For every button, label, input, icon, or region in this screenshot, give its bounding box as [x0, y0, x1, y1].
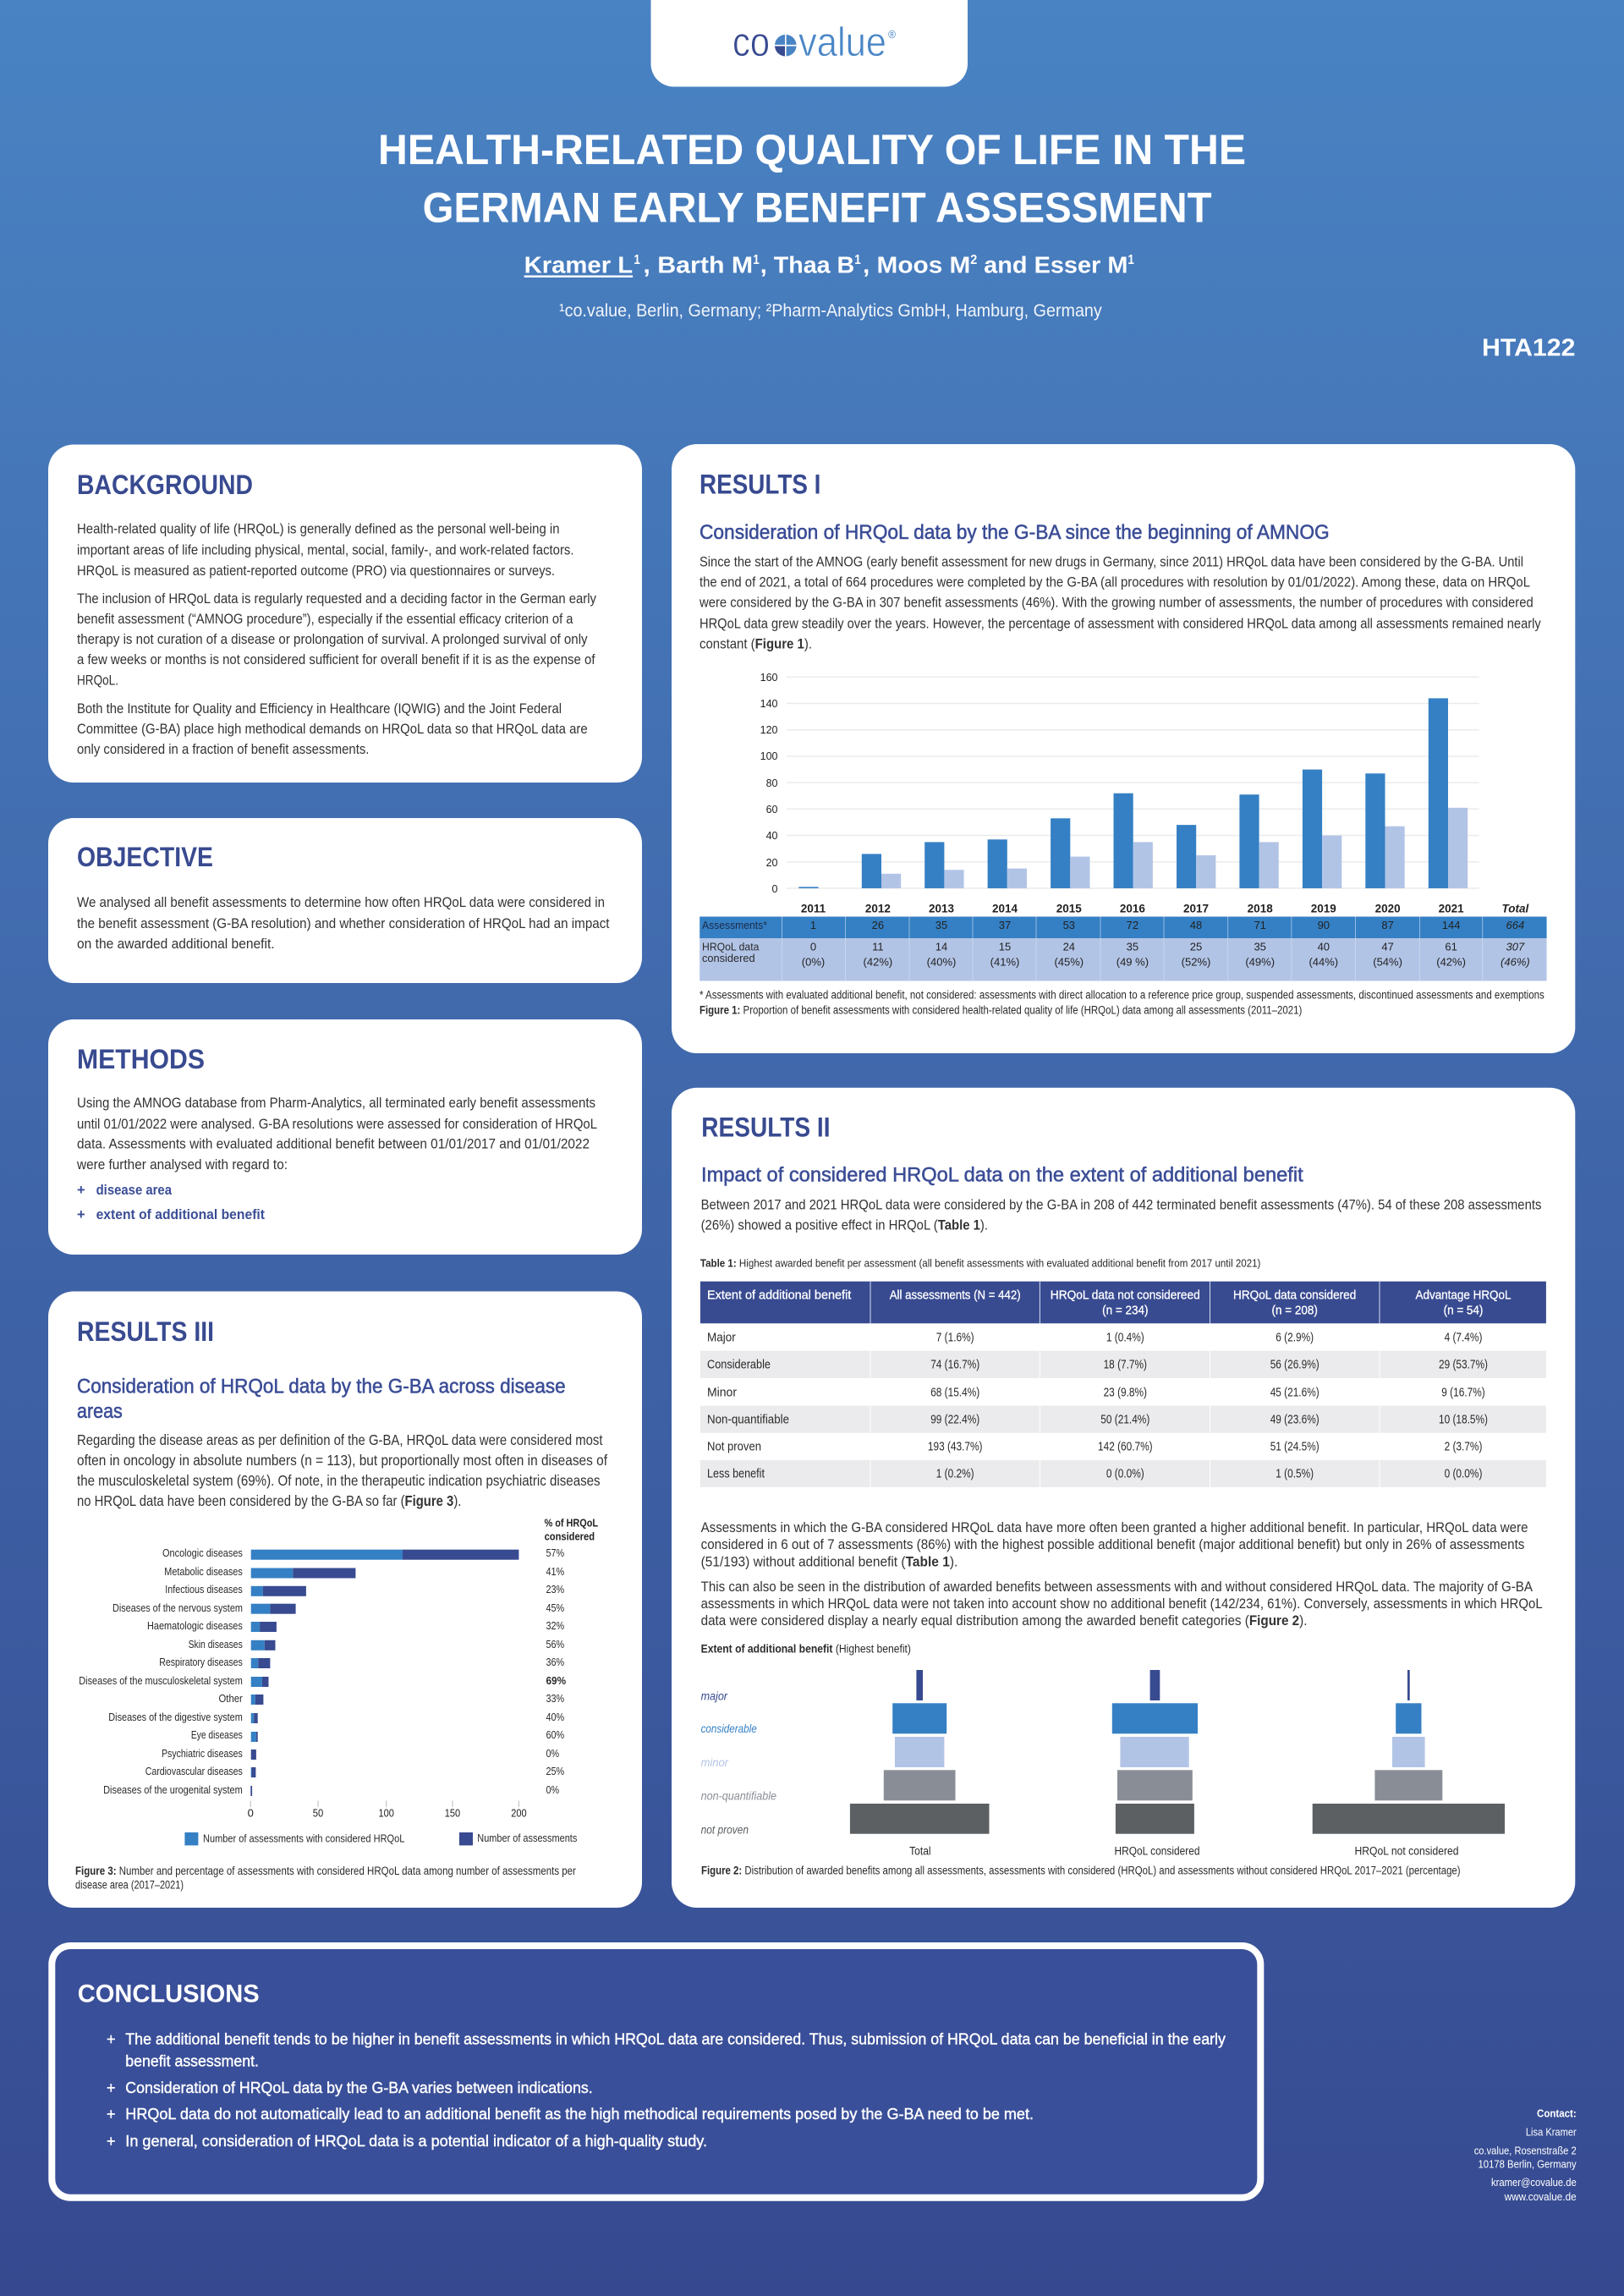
category labels: Diseases of the urogenital system [103, 1783, 243, 1796]
table row: less benefit: 1 (0.5%) [1276, 1467, 1314, 1480]
legend [184, 1832, 578, 1845]
funnel: HRQoL considered [1112, 1670, 1199, 1857]
table header: HRQoL data considered [1233, 1288, 1356, 1302]
table row: less benefit: 0 (0.0%) [1106, 1467, 1144, 1480]
bullet list: conclusions: HRQoL data do not automatically lead to an additional benefit as the high methodical requirements posed by the G-BA need to be met. [125, 2106, 1034, 2123]
category labels: Cardiovascular diseases [145, 1765, 243, 1777]
bullet list: methods: disease area [96, 1183, 173, 1198]
table row: minor: 23 (9.8%) [1104, 1386, 1147, 1399]
text block: results I: Since the start of the AMNOG (early benefit assessment for new drugs in Germany, since 2011) HRQoL data have been considered by the G-BA. Until [700, 555, 1523, 570]
category labels: considerable [701, 1722, 757, 1735]
heading: methods: METHODS [77, 1044, 205, 1074]
contact: 10178 Berlin, Germany [1479, 2159, 1577, 2171]
heading: conclusions: CONCLUSIONS [78, 1980, 260, 2008]
table row: assessments: 71 [1254, 919, 1266, 931]
bullet list: conclusions: + [107, 2106, 116, 2123]
table row: HRQoL data considered: 14 [935, 941, 947, 953]
bullet list: conclusions: benefit assessment. [125, 2052, 259, 2069]
heading: objective: OBJECTIVE [77, 842, 213, 872]
bullet list: methods [77, 1183, 265, 1222]
heading: results II: RESULTS II [701, 1112, 831, 1142]
table year header: 2012 [865, 903, 891, 915]
table row: HRQoL data considered: (49 %) [1116, 956, 1149, 968]
table year header: 2013 [929, 903, 955, 915]
text block: results II discussion: This can also be seen in the distribution of awarded benefits between assessments with and without considered HRQoL data. The majority of G-BA [701, 1579, 1533, 1595]
table row: considerable: 18 (7.7%) [1104, 1358, 1147, 1371]
category labels: Oncologic diseases [162, 1546, 243, 1559]
percentage values: 69% [546, 1674, 566, 1687]
panel: results I [672, 444, 1575, 1053]
y axis and gridlines: 120 [760, 724, 778, 736]
text block: background: Committee (G-BA) place high methodical demands on HRQoL data so that HRQoL data are [77, 722, 588, 737]
authors: 1 [753, 253, 760, 267]
text block: results II intro: (26%) showed a positive effect in HRQoL (Table 1). [701, 1218, 988, 1233]
text block: background: HRQoL is measured as patient-reported outcome (PRO) via questionnaires or surveys. [77, 563, 555, 579]
bullet list: conclusions: + [107, 2031, 116, 2048]
category labels: Eye diseases [191, 1728, 243, 1741]
table header: Advantage HRQoL [1416, 1288, 1511, 1302]
table row: assessments: 90 [1318, 919, 1330, 931]
y axis and gridlines: 80 [766, 777, 778, 789]
text block: results II discussion: data were considered display a nearly equal distribution among the awarded benefit categories (Figure 2). [701, 1613, 1308, 1629]
table row: assessments: 48 [1190, 919, 1202, 931]
legend: Number of assessments [477, 1832, 578, 1844]
y axis and gridlines: 40 [766, 830, 778, 842]
category labels: Diseases of the nervous system [112, 1601, 243, 1614]
table row: minor: 68 (15.4%) [930, 1386, 979, 1399]
text block: background: only considered in a fraction of benefit assessments. [77, 742, 369, 757]
percentage values: 40% [546, 1711, 565, 1723]
legend: Number of assessments with considered HRQoL [203, 1832, 404, 1844]
y axis and gridlines: 160 [760, 672, 778, 684]
funnel: HRQoL not considered [1313, 1670, 1505, 1857]
panel: background [48, 445, 642, 783]
table header: (n = 208) [1272, 1304, 1318, 1317]
text block: results III: no HRQoL data have been considered by the G-BA so far (Figure 3). [77, 1492, 461, 1509]
authors: 1 [634, 253, 640, 267]
table row: HRQoL data considered: 35 [1254, 941, 1266, 953]
table row: minor: Minor [707, 1386, 737, 1399]
table row: major: Major [707, 1331, 736, 1344]
text block: background: Health-related quality of life (HRQoL) is generally defined as the personal well-being in [77, 522, 560, 537]
table row: assessments: 664 [1506, 919, 1524, 931]
table row: HRQoL data considered: 25 [1190, 941, 1202, 953]
panel: conclusions [52, 1946, 1260, 2198]
table row: assessments: 72 [1127, 919, 1138, 931]
y axis and gridlines: 140 [760, 698, 778, 710]
table row: major [707, 1331, 1482, 1344]
text block: methods: were further analysed with regard to: [76, 1157, 288, 1173]
text block: results II intro: Between 2017 and 2021 HRQoL data were considered by the G-BA in 208 of 442 terminated benefit assessments (47%). 54 of these 208 assessments [701, 1197, 1541, 1212]
logo: co.value: co [732, 20, 770, 65]
table header: HRQoL data not considereed [1051, 1288, 1200, 1302]
caption: figure 3: Figure 3: Number and percentage of assessments with considered HRQoL data among number of assessments per [75, 1865, 576, 1877]
bullet list: conclusions: The additional benefit tends to be higher in benefit assessments in which HRQoL data are considered. Thus, submission of HRQoL data can be beneficial in the early [125, 2031, 1226, 2048]
table year header: 2017 [1183, 903, 1209, 915]
text block: objective: We analysed all benefit assessments to determine how often HRQoL data were considered in [77, 895, 605, 910]
x axis [248, 1800, 527, 1819]
percentage values [546, 1546, 566, 1796]
table row: non-quantifiable: 49 (23.6%) [1270, 1413, 1320, 1426]
panel: results III [48, 1291, 642, 1908]
table row: HRQoL data considered: 61 [1445, 941, 1457, 953]
authors: 1 [1127, 253, 1134, 267]
caption: figure 2: Figure 2: Distribution of awarded benefits among all assessments, assessments with considered (HRQoL) and assessments without considered HRQoL 2017–2021 (percentage) [701, 1864, 1461, 1876]
text block: results I: were considered by the G-BA in 307 benefit assessments (46%). With the growing number of assessments, the number of procedures with considered [699, 596, 1533, 611]
table header: (n = 234) [1102, 1304, 1149, 1317]
authors: Kramer L [524, 252, 633, 278]
bars: assessments [798, 698, 1448, 888]
y axis and gridlines [760, 672, 1479, 895]
category labels: Diseases of the musculoskeletal system [79, 1674, 243, 1687]
table year header [801, 903, 1529, 915]
table year header: 2016 [1120, 903, 1145, 915]
table row: HRQoL data considered: (46%) [1501, 956, 1530, 968]
text block: results III [77, 1431, 607, 1509]
percentage values: 25% [546, 1765, 565, 1777]
table row: HRQoL data considered: (45%) [1054, 956, 1084, 968]
text block: results I: the end of 2021, a total of 664 procedures were completed by the G-BA (all procedures with resolution by 01/01/2022). Among these, data on HRQoL [700, 575, 1530, 590]
text block: results II discussion: Assessments in which the G-BA considered HRQoL data have more often been granted a higher additional benefit. In particular, HRQoL data were [701, 1520, 1528, 1535]
table row: HRQoL data considered: (42%) [1436, 956, 1466, 968]
text block: results III: the musculoskeletal system (69%). Of note, in the therapeutic indication psychiatric diseases [77, 1472, 601, 1489]
category labels: non-quantifiable [701, 1788, 776, 1802]
category labels: minor [701, 1755, 729, 1769]
footnote and caption: figure 1 [700, 989, 1544, 1017]
text block: results II discussion: considered in 6 out of 7 assessments (86%) with the highest possible additional benefit (major additional benefit) but only in 26% of assessments [701, 1537, 1524, 1552]
table row: assessments: 144 [1442, 919, 1460, 931]
chart label: Extent of additional benefit (Highest benefit) [701, 1642, 911, 1655]
bullet list: conclusions: In general, consideration of HRQoL data is a potential indicator of a high-quality study. [125, 2133, 707, 2150]
table row: HRQoL data considered: 0 [810, 941, 816, 953]
table row: HRQoL data considered: (49%) [1245, 956, 1275, 968]
table year header: 2020 [1375, 903, 1401, 915]
x axis: 150 [445, 1806, 460, 1819]
authors: 1 [854, 253, 861, 267]
table row: assessments: 35 [935, 919, 947, 931]
text block: results I: HRQoL data grew steadily over the years. However, the percentage of assessment with considered HRQoL data among all assessments remained nearly [700, 616, 1541, 631]
table row: non-quantifiable: 50 (21.4%) [1100, 1413, 1149, 1426]
caption: figure 3: disease area (2017–2021) [75, 1879, 184, 1892]
data table: assessments per year [700, 903, 1547, 981]
text block: background: benefit assessment (“AMNOG procedure”), especially if the essential efficacy criterion of a [77, 612, 573, 627]
bullet list: methods: + [77, 1207, 85, 1222]
percentage values: 0% [546, 1783, 559, 1796]
panel: objective [48, 818, 642, 983]
text block: results II discussion: (51/193) without additional benefit (Table 1). [701, 1554, 957, 1569]
table row: not proven: 193 (43.7%) [928, 1440, 982, 1453]
authors: , Barth M [643, 252, 753, 278]
authors [524, 252, 1134, 278]
heading: results III: RESULTS III [77, 1316, 214, 1347]
title: HEALTH-RELATED QUALITY OF LIFE IN THE [378, 126, 1246, 173]
text block: results I [699, 555, 1541, 651]
x axis: 0 [248, 1806, 254, 1819]
caption: table 1: Table 1: Highest awarded benefit per assessment (all benefit assessments with evaluated additional benefit from 2017 until 2021) [700, 1256, 1260, 1269]
percentage values: 45% [546, 1601, 565, 1614]
bullet list: methods: extent of additional benefit [96, 1207, 265, 1222]
contact [1474, 2108, 1577, 2203]
title [378, 126, 1246, 231]
table row: HRQoL data considered: (52%) [1182, 956, 1210, 968]
title: GERMAN EARLY BENEFIT ASSESSMENT [423, 184, 1212, 231]
funnel: HRQoL not considered: HRQoL not considered [1355, 1844, 1458, 1857]
table row: less benefit: Less benefit [707, 1467, 765, 1480]
table row: assessments: 26 [872, 919, 884, 931]
subheading: results III: Consideration of HRQoL data by the G-BA across disease [77, 1376, 566, 1398]
footnote and caption: figure 1: Figure 1: Proportion of benefit assessments with considered health-related quality of life (HRQoL) data among all assessments (2011–2021) [700, 1004, 1302, 1017]
table row: minor: 9 (16.7%) [1441, 1386, 1485, 1399]
table row: considerable [707, 1358, 1488, 1371]
table row: assessments: 87 [1381, 919, 1394, 931]
text block: methods: data. Assessments with evaluated additional benefit between 01/01/2017 and 01/01/2022 [77, 1137, 590, 1152]
text block: methods [76, 1096, 597, 1173]
funnel chart: distribution of benefits [701, 1642, 1505, 1857]
table row: assessments: 53 [1063, 919, 1075, 931]
heading: background: BACKGROUND [77, 470, 253, 500]
table header: Extent of additional benefit [707, 1288, 851, 1302]
table row: non-quantifiable [707, 1413, 1488, 1426]
table row: minor [707, 1386, 1485, 1399]
category labels: not proven [701, 1823, 749, 1837]
table year header: 2015 [1056, 903, 1082, 915]
panel: results II [672, 1088, 1575, 1908]
table row: not proven [707, 1440, 1482, 1453]
table row: HRQoL data considered: (54%) [1373, 956, 1402, 968]
percentage values: 32% [546, 1619, 565, 1632]
table row stripes [700, 1351, 1546, 1487]
table row: HRQoL data considered: 47 [1381, 941, 1394, 953]
table header: (n = 54) [1444, 1304, 1483, 1317]
percentage values: 60% [546, 1728, 565, 1741]
category labels: Diseases of the digestive system [108, 1711, 243, 1723]
text block: background [77, 522, 597, 757]
table row: HRQoL data considered: considered [702, 952, 755, 964]
text block: results III: often in oncology in absolute numbers (n = 113), but proportionally most often in diseases of [77, 1452, 607, 1469]
table year header: 2019 [1311, 903, 1336, 915]
table year header: Total [1502, 903, 1529, 915]
text block: results III: Regarding the disease areas as per definition of the G-BA, HRQoL data were considered most [77, 1431, 603, 1448]
table row: HRQoL data considered: HRQoL data [702, 941, 760, 953]
x axis: 100 [379, 1806, 394, 1819]
table row: assessments [700, 917, 1547, 938]
table row: minor: 45 (21.6%) [1270, 1386, 1320, 1399]
category labels: Respiratory diseases [159, 1656, 243, 1668]
text block: objective [77, 895, 610, 952]
table row: HRQoL data considered: 40 [1318, 941, 1330, 953]
text block: methods: until 01/01/2022 were analysed. G-BA resolutions were assessed for consideration of HRQoL [77, 1117, 597, 1132]
bar chart: assessments per year [760, 672, 1479, 895]
affiliations: ¹co.value, Berlin, Germany; ²Pharm-Analytics GmbH, Hamburg, Germany [559, 301, 1102, 321]
table row: HRQoL data considered: (0%) [802, 956, 825, 968]
table year header: 2021 [1439, 903, 1464, 915]
table row: HRQoL data considered: (42%) [864, 956, 892, 968]
table row: considerable: Considerable [707, 1358, 771, 1371]
percentage values: 56% [546, 1638, 565, 1651]
table header: All assessments (N = 442) [890, 1288, 1021, 1302]
table row: assessments: Assessments* [702, 919, 767, 931]
funnel: total: Total [909, 1844, 931, 1857]
text block: background: HRQoL. [77, 673, 118, 688]
authors: , Thaa B [760, 252, 854, 278]
contact: www.covalue.de [1504, 2191, 1577, 2203]
contact: Lisa Kramer [1526, 2126, 1577, 2138]
category labels: Haematologic diseases [147, 1619, 243, 1632]
table row: HRQoL data considered: 307 [1506, 941, 1525, 953]
table row: less benefit [707, 1467, 1482, 1480]
subheading: results II: Impact of considered HRQoL data on the extent of additional benefit [701, 1164, 1303, 1187]
y axis and gridlines: 0 [772, 883, 778, 895]
text block: objective: on the awarded additional benefit. [77, 937, 275, 952]
contact: kramer@covalue.de [1491, 2177, 1577, 2189]
contact: co.value, Rosenstraße 2 [1474, 2145, 1577, 2156]
percentage values: 57% [546, 1546, 565, 1559]
bullet list: conclusions [107, 2031, 1226, 2150]
table row: HRQoL data considered: (44%) [1309, 956, 1338, 968]
authors: and Esser M [984, 252, 1127, 278]
text block: background: The inclusion of HRQoL data is regularly requested and a deciding factor in the German early [77, 591, 597, 607]
y axis and gridlines: 100 [760, 750, 778, 762]
bars: considered HRQoL [251, 1550, 403, 1777]
table row: major: 6 (2.9%) [1276, 1331, 1314, 1344]
authors: , Moos M [863, 252, 970, 278]
bullet list: conclusions: Consideration of HRQoL data by the G-BA varies between indications. [125, 2079, 593, 2096]
table row: not proven: Not proven [707, 1440, 761, 1453]
text block: background: therapy is not curation of a disease or prolongation of survival. A prolonged survival of only [77, 632, 588, 647]
table row: HRQoL data considered: 11 [872, 941, 884, 953]
category labels [701, 1689, 776, 1837]
category labels: Psychiatric diseases [162, 1747, 243, 1760]
percentage values: 33% [546, 1692, 565, 1705]
column header: percentage: % of HRQoL [545, 1517, 598, 1530]
authors: 2 [970, 253, 977, 267]
percentage values: 36% [546, 1656, 565, 1668]
text block: results II discussion: assessments in which HRQoL data were not taken into account show no additional benefit (142/234, 61%). Conversely, assessments in which HRQoL [701, 1596, 1543, 1612]
bullet list: conclusions: + [107, 2133, 116, 2150]
logo: co.value: value [798, 20, 886, 65]
table row: not proven: 142 (60.7%) [1098, 1440, 1153, 1453]
table row: not proven: 51 (24.5%) [1270, 1440, 1320, 1453]
category labels [79, 1546, 243, 1796]
funnel: HRQoL considered: HRQoL considered [1115, 1844, 1199, 1857]
table row: HRQoL data considered: 15 [999, 941, 1011, 953]
percentage values: 0% [546, 1747, 559, 1760]
table row: less benefit: 1 (0.2%) [936, 1467, 974, 1480]
table 1 [700, 1282, 1546, 1487]
category labels: Infectious diseases [165, 1583, 243, 1596]
subheading: results III: areas [77, 1400, 123, 1423]
table row: HRQoL data considered: 35 [1127, 941, 1138, 953]
text block: results II intro [701, 1197, 1541, 1233]
table row: HRQoL data considered: (41%) [990, 956, 1019, 968]
text block: background: Both the Institute for Quality and Efficiency in Healthcare (IQWIG) and the Joint Federal [77, 701, 562, 717]
percentage values: 41% [546, 1565, 565, 1578]
table year header: 2014 [992, 903, 1018, 915]
bars: number of assessments [250, 1550, 518, 1796]
subheading: results III [77, 1376, 566, 1423]
subheading: results I: Consideration of HRQoL data by the G-BA since the beginning of AMNOG [700, 521, 1330, 544]
table row: HRQoL data considered: (40%) [927, 956, 956, 968]
table row: considerable: 56 (26.9%) [1270, 1358, 1320, 1371]
table row: non-quantifiable: 99 (22.4%) [930, 1413, 979, 1426]
bullet list: conclusions: + [107, 2079, 116, 2096]
text block: results II discussion [701, 1520, 1543, 1629]
table row: major: 4 (7.4%) [1445, 1331, 1482, 1344]
y axis and gridlines: 60 [766, 804, 778, 816]
table row: HRQoL data considered [700, 938, 1547, 981]
table row: considerable: 74 (16.7%) [930, 1358, 979, 1371]
table row: not proven: 2 (3.7%) [1445, 1440, 1482, 1453]
logo: co.value: ® [888, 28, 896, 41]
table row: non-quantifiable: 10 (18.5%) [1439, 1413, 1488, 1426]
heading: results I: RESULTS I [700, 470, 820, 500]
poster code: HTA122 [1482, 335, 1575, 362]
text block: objective: the benefit assessment (G-BA resolution) and whether consideration of HRQoL had an impact [77, 916, 610, 931]
table row: less benefit: 0 (0.0%) [1445, 1467, 1482, 1480]
table year header: 2011 [801, 903, 826, 915]
chart: assessments by disease area [79, 1517, 598, 1845]
funnel: total [850, 1670, 990, 1857]
column header: percentage: considered [545, 1530, 595, 1543]
panel: methods [48, 1019, 642, 1255]
text block: background: important areas of life including physical, mental, social, family-, and work-related factors. [77, 543, 573, 558]
bullet list: methods: + [77, 1183, 85, 1198]
text block: results I: constant (Figure 1). [700, 636, 812, 651]
table row: major: 1 (0.4%) [1106, 1331, 1144, 1344]
logo: co.value [650, 0, 968, 87]
y axis and gridlines: 20 [766, 857, 778, 869]
text block: background: a few weeks or months is not considered sufficient for overall benefit if it is as the expense of [77, 652, 595, 667]
table row: major: 7 (1.6%) [936, 1331, 974, 1344]
table row: considerable: 29 (53.7%) [1439, 1358, 1488, 1371]
table row: assessments: 37 [999, 919, 1011, 931]
percentage values: 23% [546, 1583, 565, 1596]
caption: figure 3 [75, 1865, 576, 1892]
category labels: Other [218, 1692, 243, 1705]
x axis: 50 [313, 1806, 323, 1819]
table row: HRQoL data considered: 24 [1063, 941, 1075, 953]
column header: percentage [545, 1517, 598, 1543]
table year header: 2018 [1248, 903, 1273, 915]
bars: HRQoL data considered [881, 808, 1468, 888]
x axis: 200 [511, 1806, 527, 1819]
table header [700, 1282, 1546, 1323]
table row: assessments: 1 [810, 919, 816, 931]
text block: methods: Using the AMNOG database from Pharm-Analytics, all terminated early benefit assessments [77, 1096, 595, 1111]
category labels: Metabolic diseases [164, 1565, 243, 1578]
table row: non-quantifiable: Non-quantifiable [707, 1413, 789, 1426]
category labels: major [701, 1689, 728, 1702]
category labels: Skin diseases [189, 1638, 243, 1651]
contact: Contact: [1537, 2108, 1577, 2120]
